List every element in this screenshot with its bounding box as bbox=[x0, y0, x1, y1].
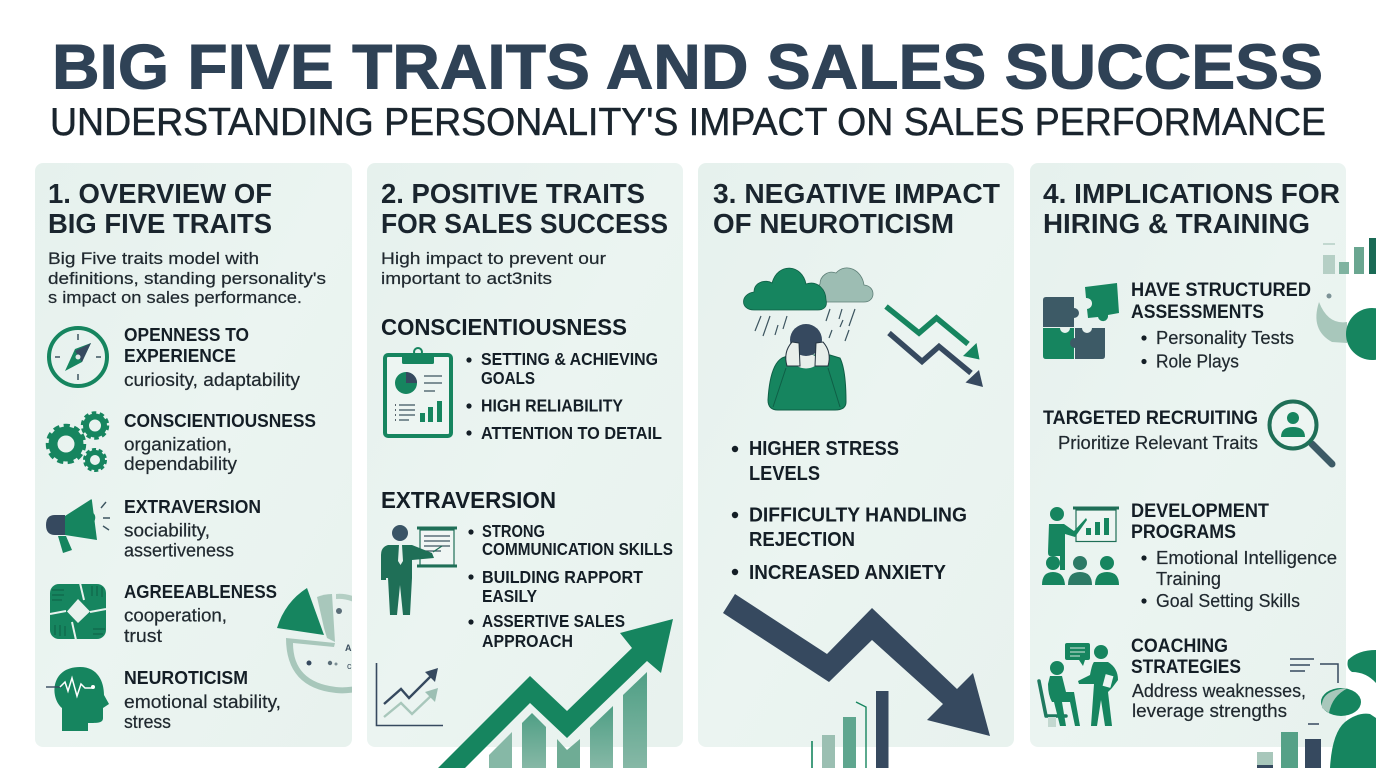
icon: gears bbox=[48, 413, 108, 470]
growth bars bbox=[489, 672, 647, 768]
item: openness to experience bbox=[49, 325, 300, 390]
bullet list: extraversion: ASSERTIVE SALES bbox=[482, 611, 625, 631]
small line chart bbox=[376, 663, 443, 726]
decorative pie chart: c bbox=[347, 661, 352, 671]
item: conscientiousness bbox=[48, 411, 316, 474]
decorative pie chart: A bbox=[345, 643, 352, 653]
text: structured assessments: ASSESSMENTS bbox=[1131, 301, 1264, 323]
arrow: rising growth bbox=[438, 619, 673, 768]
subtitle: UNDERSTANDING PERSONALITY'S IMPACT ON SALES PERFORMANCE bbox=[50, 101, 1326, 144]
bullet list: conscientiousness: GOALS bbox=[481, 368, 535, 388]
section heading: extraversion: EXTRAVERSION bbox=[381, 487, 556, 513]
item: agreeableness: AGREEABLENESS bbox=[124, 582, 277, 602]
decorative pie chart bbox=[277, 588, 356, 693]
bullet list: extraversion: EASILY bbox=[482, 586, 537, 606]
intro text bbox=[381, 249, 606, 288]
item: agreeableness bbox=[50, 582, 277, 646]
bullet list: neuroticism effects: LEVELS bbox=[749, 462, 820, 485]
bullet list: neuroticism effects: INCREASED ANXIETY bbox=[749, 561, 946, 584]
heading: negative impact: 3. NEGATIVE IMPACT bbox=[713, 178, 1000, 209]
item: openness to experience: curiosity, adaptability bbox=[124, 370, 300, 390]
text: structured assessments: Personality Tests bbox=[1156, 327, 1294, 348]
icon: stressed person under rain clouds bbox=[744, 268, 873, 410]
item: extraversion: assertiveness bbox=[124, 540, 234, 560]
panel: negative impact of neuroticism bbox=[698, 163, 1014, 768]
text: targeted recruiting: Prioritize Relevant Traits bbox=[1058, 432, 1258, 453]
bullet list: neuroticism effects bbox=[732, 437, 967, 584]
icon: clipboard report bbox=[385, 348, 451, 436]
intro text: definitions, standing personality's bbox=[48, 269, 326, 288]
icon: megaphone bbox=[46, 499, 110, 553]
text: targeted recruiting bbox=[1043, 407, 1258, 453]
heading: implications bbox=[1043, 178, 1340, 239]
heading: overview bbox=[48, 178, 272, 239]
text: targeted recruiting: TARGETED RECRUITING bbox=[1043, 407, 1258, 429]
text: structured assessments bbox=[1131, 279, 1311, 372]
item: extraversion bbox=[46, 497, 261, 560]
heading: positive traits: 2. POSITIVE TRAITS bbox=[381, 178, 645, 209]
decorative bottom-right figure and bars bbox=[1257, 650, 1376, 768]
intro text: important to act3nits bbox=[381, 269, 552, 288]
heading: negative impact bbox=[713, 178, 1000, 239]
text: development programs bbox=[1131, 500, 1337, 611]
bullet list: neuroticism effects: DIFFICULTY HANDLING bbox=[749, 504, 967, 526]
text: development programs: Emotional Intelligence bbox=[1156, 547, 1337, 568]
bullet list: neuroticism effects: HIGHER STRESS bbox=[749, 437, 899, 460]
item: openness to experience: OPENNESS TO bbox=[124, 325, 249, 345]
item: neuroticism bbox=[46, 667, 281, 732]
text: coaching strategies: COACHING bbox=[1131, 635, 1228, 657]
heading: implications: 4. IMPLICATIONS FOR bbox=[1043, 178, 1340, 209]
text: structured assessments: Role Plays bbox=[1156, 350, 1239, 372]
text: coaching strategies: Address weaknesses, bbox=[1132, 680, 1306, 701]
title: BIG FIVE TRAITS AND SALES SUCCESS bbox=[52, 32, 1323, 102]
bullet list: neuroticism effects: REJECTION bbox=[749, 528, 855, 551]
icon: coaching conversation bbox=[1039, 643, 1118, 727]
heading: overview: BIG FIVE TRAITS bbox=[48, 208, 272, 239]
text: coaching strategies: STRATEGIES bbox=[1131, 656, 1241, 678]
bullet list: extraversion: STRONG bbox=[482, 521, 545, 541]
item: neuroticism: stress bbox=[124, 712, 171, 732]
text: coaching strategies bbox=[1131, 635, 1306, 721]
heading: negative impact: OF NEUROTICISM bbox=[713, 208, 954, 239]
icon: presenter with board bbox=[381, 525, 457, 615]
item: neuroticism: emotional stability, bbox=[124, 692, 281, 712]
text: structured assessments: HAVE STRUCTURED bbox=[1131, 279, 1311, 301]
icon: puzzle bbox=[1043, 283, 1119, 359]
item: extraversion: EXTRAVERSION bbox=[124, 497, 261, 517]
heading: implications: HIRING & TRAINING bbox=[1043, 208, 1310, 239]
small bars bbox=[812, 691, 888, 768]
intro text bbox=[48, 249, 326, 307]
panel: positive traits bbox=[367, 163, 683, 768]
icon: head with pulse bbox=[46, 667, 109, 731]
text: development programs: Training bbox=[1156, 568, 1221, 589]
icon: magnifier with person bbox=[1270, 402, 1332, 464]
intro text: High impact to prevent our bbox=[381, 249, 606, 268]
icon: trainer with audience bbox=[1042, 507, 1119, 585]
icon: joined hands bbox=[50, 583, 106, 640]
arrow: large decline bbox=[723, 594, 990, 736]
section heading: conscientiousness: CONSCIENTIOUSNESS bbox=[381, 314, 627, 340]
item: openness to experience: EXPERIENCE bbox=[124, 346, 236, 366]
heading: positive traits: FOR SALES SUCCESS bbox=[381, 208, 668, 239]
bullet list: extraversion: APPROACH bbox=[482, 631, 573, 651]
item: extraversion: sociability, bbox=[124, 520, 210, 540]
icon: compass bbox=[49, 328, 107, 386]
bullet list: conscientiousness: HIGH RELIABILITY bbox=[481, 396, 623, 416]
item: neuroticism: NEUROTICISM bbox=[124, 668, 248, 688]
panel: overview of big five traits bbox=[35, 163, 356, 747]
item: agreeableness: cooperation, bbox=[124, 606, 227, 626]
intro text: s impact on sales performance. bbox=[48, 288, 302, 307]
heading: positive traits bbox=[381, 178, 668, 239]
intro text: Big Five traits model with bbox=[48, 249, 259, 268]
bullet list: extraversion bbox=[468, 521, 673, 651]
text: development programs: PROGRAMS bbox=[1131, 521, 1236, 543]
bullet list: extraversion: COMMUNICATION SKILLS bbox=[482, 539, 673, 559]
arrow: small dark decline bbox=[889, 333, 983, 387]
arrow: small green decline bbox=[886, 306, 980, 360]
text: development programs: Goal Setting Skills bbox=[1156, 590, 1300, 611]
item: conscientiousness: CONSCIENTIOUSNESS bbox=[124, 411, 316, 431]
item: agreeableness: trust bbox=[124, 626, 162, 646]
bullet list: conscientiousness bbox=[466, 349, 662, 443]
decorative top-right bars and shapes bbox=[1316, 238, 1376, 360]
text: development programs: DEVELOPMENT bbox=[1131, 500, 1269, 522]
bullet list: extraversion: BUILDING RAPPORT bbox=[482, 567, 643, 587]
item: conscientiousness: dependability bbox=[124, 454, 237, 474]
bullet list: conscientiousness: ATTENTION TO DETAIL bbox=[481, 423, 662, 443]
bullet list: conscientiousness: SETTING & ACHIEVING bbox=[481, 349, 658, 369]
panel: implications for hiring and training bbox=[1030, 163, 1376, 768]
item: conscientiousness: organization, bbox=[124, 434, 232, 454]
text: coaching strategies: leverage strengths bbox=[1132, 700, 1287, 721]
heading: overview: 1. OVERVIEW OF bbox=[48, 178, 272, 209]
